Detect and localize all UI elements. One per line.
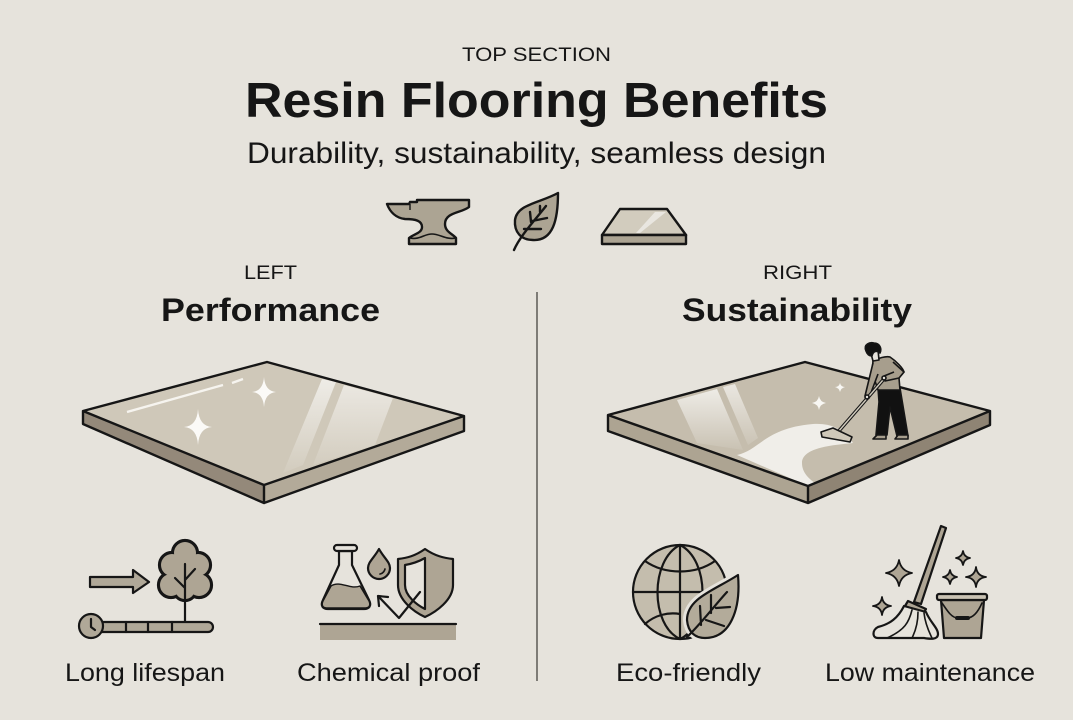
globe	[633, 545, 727, 639]
label: long lifespan: Long lifespan	[65, 659, 225, 687]
heading: left: LEFT	[244, 263, 297, 284]
flask	[322, 551, 370, 609]
tree	[158, 540, 212, 621]
icon: eco-friendly	[633, 545, 738, 639]
person with mop	[821, 343, 908, 442]
mop	[914, 526, 946, 604]
heading: sustainability: Sustainability	[682, 292, 912, 328]
heading: performance: Performance	[161, 292, 380, 328]
heading: right: RIGHT	[763, 263, 832, 284]
bucket	[941, 600, 984, 638]
arrow	[90, 570, 149, 593]
eyebrow: top section: TOP SECTION	[462, 45, 611, 66]
icon: leaf	[514, 193, 558, 250]
icon: long lifespan	[79, 540, 213, 638]
subtitle: Durability, sustainability, seamless design	[247, 137, 826, 170]
label: low maintenance: Low maintenance	[825, 659, 1035, 687]
timeline	[100, 622, 213, 632]
icon: chemical proof	[320, 545, 456, 640]
label: eco-friendly: Eco-friendly	[616, 659, 762, 687]
drop	[368, 549, 390, 579]
surface	[320, 624, 456, 640]
check arrow	[378, 592, 420, 618]
illustration: glossy floor slab	[83, 362, 464, 503]
icon: anvil	[387, 200, 469, 244]
icon: low maintenance	[873, 526, 987, 639]
shield	[398, 549, 453, 617]
title: Resin Flooring Benefits	[245, 74, 828, 128]
icon: slab	[602, 209, 686, 244]
label: chemical proof: Chemical proof	[297, 659, 480, 687]
sparkles	[873, 551, 986, 615]
illustration: slab with person mopping	[608, 343, 990, 503]
leaf	[687, 575, 738, 638]
cleaned swash	[737, 424, 853, 486]
